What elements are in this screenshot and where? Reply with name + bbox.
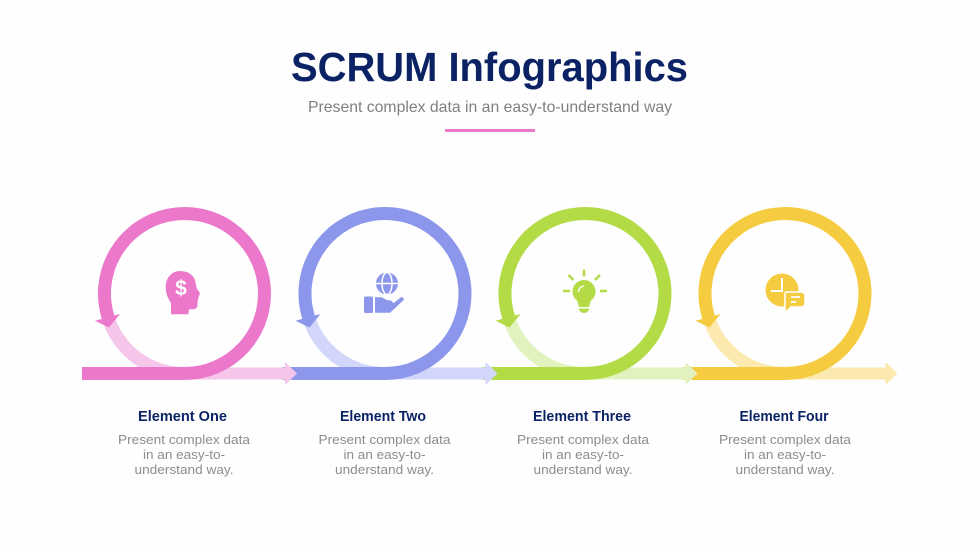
description four: understand way. xyxy=(736,463,834,477)
icon: light bulb xyxy=(563,270,607,313)
loop arrow one xyxy=(82,214,297,385)
description four: in an easy-to- xyxy=(744,448,826,462)
loop arrow two xyxy=(282,214,498,385)
loop arrow three xyxy=(482,214,698,385)
panel: element two xyxy=(282,214,498,477)
description four: Present complex data xyxy=(719,433,851,447)
description three: understand way. xyxy=(534,463,632,477)
label four: Element Four xyxy=(740,409,829,425)
description two: Present complex data xyxy=(318,433,451,447)
description two: in an easy-to- xyxy=(344,448,426,462)
icon: head with dollar sign: $ xyxy=(175,277,187,300)
label one: Element One xyxy=(138,409,227,425)
description three: in an easy-to- xyxy=(542,448,624,462)
label three: Element Three xyxy=(533,409,631,425)
description one: Present complex data xyxy=(118,433,250,447)
title: SCRUM Infographics xyxy=(291,44,688,90)
loop arrow four xyxy=(682,214,898,385)
label two: Element Two xyxy=(340,409,426,425)
title underline xyxy=(445,129,535,132)
description three: Present complex data xyxy=(517,433,649,447)
description one: in an easy-to- xyxy=(143,448,225,462)
icon: head with dollar sign xyxy=(166,271,200,314)
icon: clock and chat bubble xyxy=(766,274,805,313)
subtitle: Present complex data in an easy-to-understand way xyxy=(308,99,672,116)
panel: element four xyxy=(682,214,898,477)
description one: understand way. xyxy=(134,463,234,477)
panel: element three xyxy=(482,214,698,477)
description two: understand way. xyxy=(335,463,434,477)
icon: hand holding globe xyxy=(364,272,404,313)
panel: element one xyxy=(82,214,297,477)
